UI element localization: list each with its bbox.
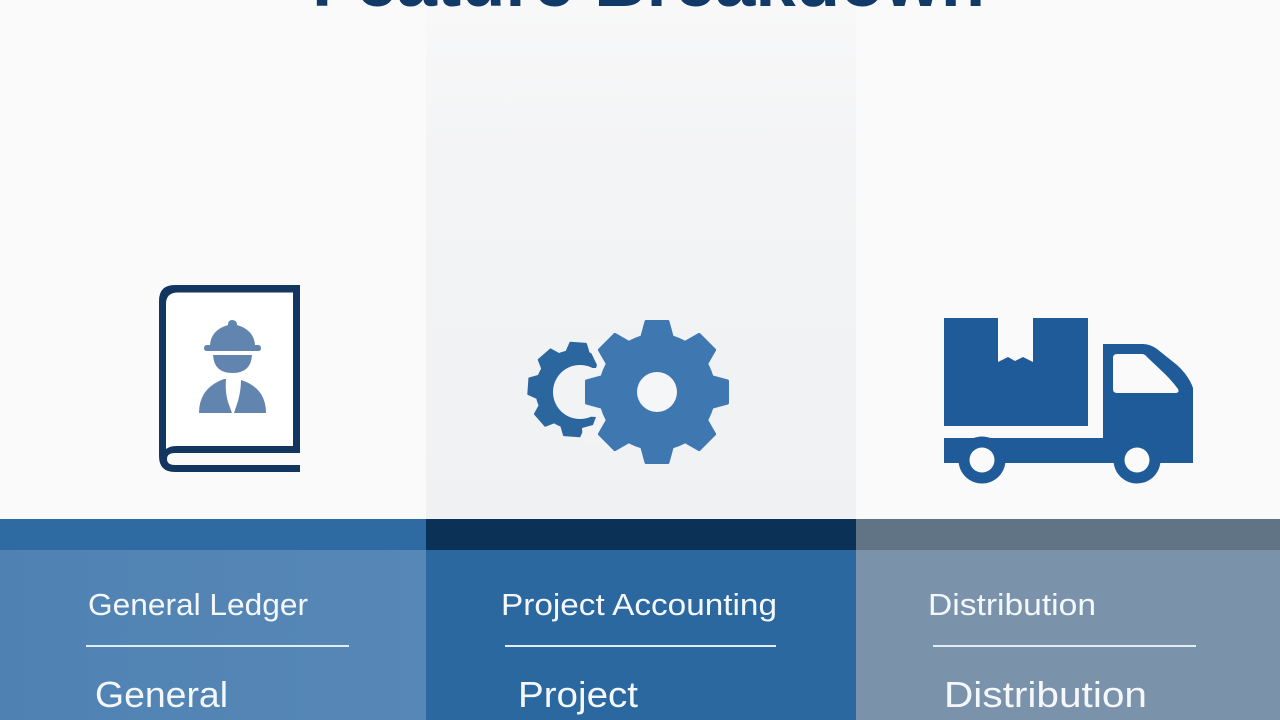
heading: Distribution: Distribution (928, 587, 1096, 622)
panel: General Ledger (0, 519, 426, 720)
icon: worker figure (199, 320, 266, 413)
icon: book with worker (159, 285, 300, 472)
text: General: General (95, 674, 228, 715)
heading: Project Accounting: Project Accounting (501, 587, 777, 622)
panel: middle column background (426, 0, 856, 519)
icon: gears (525, 322, 728, 462)
text: Project: Project (518, 674, 638, 715)
icon: delivery truck (944, 318, 1193, 484)
panel: Distribution (856, 519, 1280, 720)
icon: large gear (586, 322, 728, 462)
text: Distribution: Distribution (944, 674, 1147, 715)
panel: Project Accounting (426, 519, 856, 720)
icon: small gear (525, 340, 625, 439)
heading: General Ledger: General Ledger (88, 587, 308, 622)
